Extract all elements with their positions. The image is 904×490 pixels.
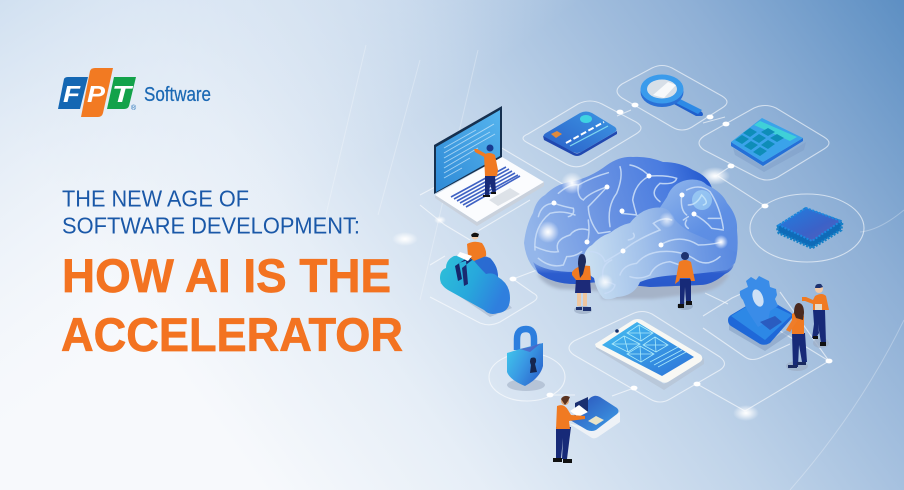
logo mark: P bbox=[81, 68, 113, 117]
icon: tablet bbox=[595, 319, 704, 390]
brain back lobe bbox=[524, 157, 722, 287]
person: man with tablet bbox=[802, 284, 829, 348]
network frames and connectors bbox=[420, 66, 864, 411]
brain lower band bbox=[533, 262, 734, 287]
icon: calculator bbox=[731, 118, 806, 172]
logo wordmark: Software bbox=[144, 84, 211, 106]
logo registered mark: ® bbox=[131, 104, 137, 112]
person: woman in skirt facing brain bbox=[572, 254, 592, 314]
person at pad bbox=[553, 396, 585, 463]
person at laptop bbox=[474, 144, 498, 197]
headline line 2: ACCELERATOR bbox=[61, 309, 403, 362]
brain right lobe bbox=[655, 180, 738, 270]
icon: gear on platform bbox=[728, 276, 793, 351]
person: man facing brain bbox=[675, 252, 695, 310]
title bbox=[61, 186, 403, 362]
brain folds bbox=[535, 165, 723, 293]
headline line 1: HOW AI IS THE bbox=[62, 250, 391, 303]
icon: laptop with developer bbox=[434, 106, 544, 226]
seated person bbox=[455, 232, 486, 286]
icon: microchip bbox=[777, 208, 842, 248]
icon: device pad with developer bbox=[553, 396, 620, 463]
subtitle line 2: SOFTWARE DEVELOPMENT: bbox=[62, 212, 360, 238]
subtitle line 1: THE NEW AGE OF bbox=[62, 186, 249, 212]
logo: FPT Software bbox=[58, 68, 211, 117]
brain front lobe bbox=[583, 208, 736, 299]
icon: credit card bbox=[543, 112, 617, 156]
brain lights bbox=[537, 172, 728, 290]
icon: magnifying glass bbox=[640, 74, 703, 116]
icon: padlock bbox=[507, 329, 545, 391]
logo mark: F bbox=[58, 77, 88, 109]
icon: cloud with seated person bbox=[440, 232, 512, 317]
logo mark: P: P bbox=[87, 81, 106, 107]
connector nodes and light glows bbox=[392, 103, 832, 421]
logo mark: F: F bbox=[63, 81, 81, 107]
brain shadow bbox=[537, 274, 729, 299]
icon: brain bbox=[524, 157, 738, 299]
logo mark: T: T bbox=[112, 81, 134, 107]
logo mark: T bbox=[107, 77, 136, 109]
person: woman facing gear bbox=[786, 303, 808, 371]
